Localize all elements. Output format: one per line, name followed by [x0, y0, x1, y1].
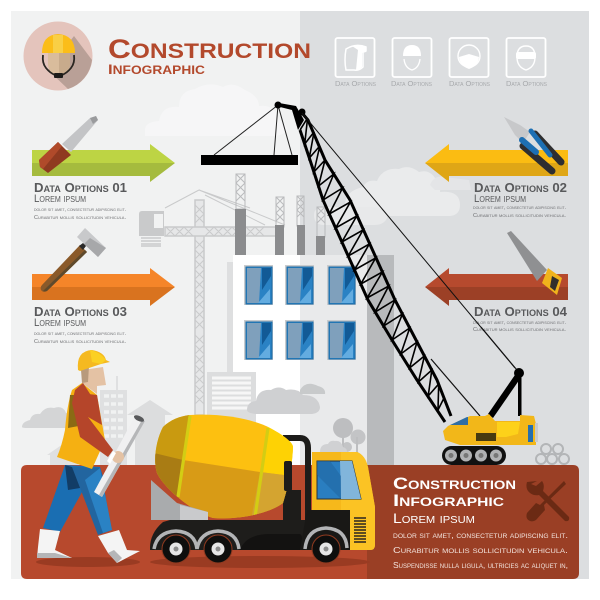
text: data options 04: dolor sit amet, consectetur adipiscing elit.	[473, 320, 566, 326]
building	[227, 255, 394, 465]
building columns under construction	[235, 174, 325, 255]
text: data options 02: Curabitur mollis sollicitudin vehicula.	[473, 213, 566, 219]
crawler crane	[201, 102, 538, 465]
mixer truck	[150, 410, 375, 563]
truck chassis	[150, 520, 312, 550]
crane tracks	[442, 446, 506, 465]
icon captions: Data Options	[335, 79, 377, 88]
bottom text block: Infographic	[393, 491, 504, 510]
text: data options 03: Lorem ipsum	[34, 317, 86, 329]
text: data options 01: Curabitur mollis sollicitudin vehicula.	[34, 215, 126, 221]
worker boots	[37, 529, 140, 563]
crane mast	[488, 368, 524, 418]
icon: screwdriver	[39, 116, 98, 173]
pipes	[536, 444, 569, 464]
header icon: helmet badge	[24, 22, 92, 90]
text: data options 03: Data Options 03	[34, 304, 127, 319]
icon: saw	[507, 231, 562, 295]
bottom text block: Construction	[393, 474, 516, 493]
title: CONSTRUCTION	[108, 34, 311, 64]
text: data options 02: Lorem ipsum	[474, 193, 526, 205]
text: data options 01: dolor sit amet, consectetur adipiscing elit.	[34, 207, 126, 213]
title	[108, 34, 311, 77]
window row 2	[244, 320, 356, 360]
text: data options 04: Curabitur mollis sollicitudin vehicula.	[473, 327, 566, 333]
bottom text block: Suspendisse nulla ligula, ultricies ac aliquet in,	[393, 560, 568, 570]
worker head	[78, 350, 110, 394]
crane boom	[298, 108, 451, 422]
text: data options 01: Data Options 01	[34, 180, 127, 195]
bottom text block: Lorem ipsum	[393, 510, 475, 526]
arrow: green	[32, 144, 175, 182]
crane body	[443, 414, 538, 445]
mixer hopper	[151, 480, 208, 520]
bottom text block: dolor sit amet, consectetur adipiscing elit.	[393, 530, 568, 540]
background tower crane	[139, 190, 285, 415]
text: data options 04	[473, 304, 568, 333]
text: data options 04: Data Options 04	[474, 304, 568, 319]
icon captions: Data Options	[506, 79, 548, 88]
text: data options 03: Curabitur mollis sollicitudin vehicula.	[34, 339, 126, 345]
text: data options 01: Lorem ipsum	[34, 193, 86, 205]
text: data options 01	[34, 180, 127, 221]
mixer latch	[284, 461, 292, 491]
title: INFOGRAPHIC	[108, 61, 205, 77]
text: data options 02: Data Options 02	[474, 180, 567, 195]
windows	[244, 265, 356, 360]
safety icons	[335, 38, 548, 88]
bottom band	[21, 465, 579, 579]
icon captions	[335, 79, 548, 88]
worker	[37, 350, 145, 563]
icon captions: Data Options	[449, 79, 491, 88]
text: data options 02: dolor sit amet, consectetur adipiscing elit.	[473, 205, 566, 211]
icon: hammer	[41, 228, 106, 292]
bottom text block	[393, 474, 568, 570]
truck wheels	[154, 528, 347, 563]
wheel shadows	[36, 556, 370, 568]
background city silhouettes	[22, 372, 366, 465]
rolled blueprint	[94, 414, 145, 497]
mixer drum	[155, 414, 293, 518]
arrow: orange	[32, 268, 175, 306]
truck cab	[300, 452, 375, 550]
arrow: yellow	[425, 144, 568, 182]
bottom text block: Curabitur mollis sollicitudin vehicula.	[393, 545, 568, 555]
text: data options 03	[34, 304, 127, 345]
icon: face shield	[336, 38, 374, 77]
icon: dust mask	[450, 38, 488, 77]
icon: hard hat	[392, 38, 432, 77]
window row 1	[244, 265, 356, 305]
crane load beam	[201, 102, 304, 165]
text: data options 03: dolor sit amet, consectetur adipiscing elit.	[34, 331, 126, 337]
icon: pliers	[504, 117, 561, 171]
icon captions: Data Options	[391, 79, 433, 88]
crane cables	[302, 113, 517, 416]
worker sleeve	[72, 383, 113, 457]
icon: wrench and screwdriver	[526, 481, 569, 521]
arrow: red	[425, 268, 568, 306]
worker legs	[43, 465, 112, 535]
text: data options 02	[473, 180, 567, 219]
background clouds	[145, 84, 471, 225]
icon: safety goggles	[506, 38, 546, 77]
truck pillar	[283, 438, 308, 522]
worker jacket	[57, 383, 105, 469]
